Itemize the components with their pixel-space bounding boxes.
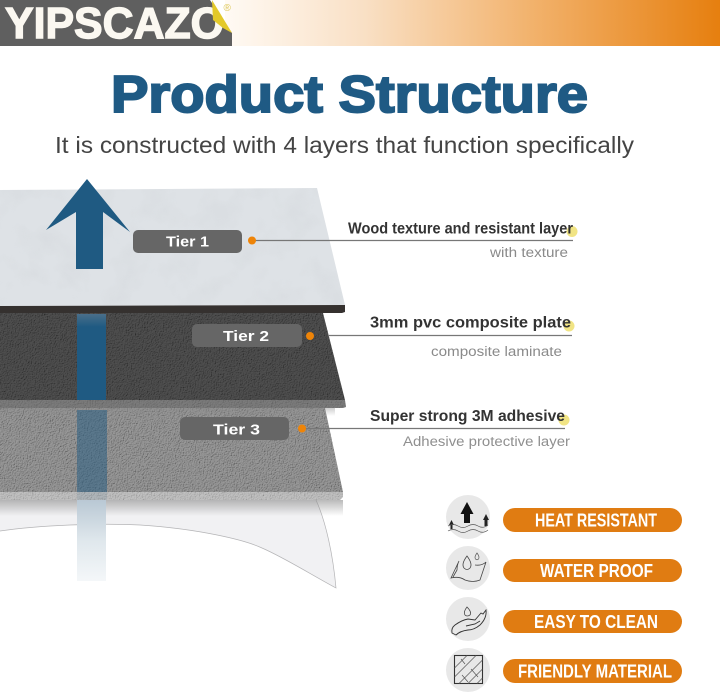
icon: heat arrows (446, 495, 490, 539)
icon: hand with drop (446, 597, 490, 641)
header banner (0, 0, 720, 48)
callout: tier 3: Super strong 3M adhesive (370, 408, 565, 425)
callout: tier 1: with texture (489, 245, 568, 260)
tier 1 label: Tier 1 (166, 234, 209, 250)
blue vertical bar through layers (77, 314, 107, 581)
badge: WATER PROOF (540, 561, 653, 581)
icon: flooring tiles (446, 648, 490, 692)
feature: water proof (446, 546, 682, 590)
upward arrow (46, 179, 130, 269)
tier 2 label (192, 324, 302, 347)
brand logo: YIPSCAZO (5, 0, 224, 48)
layered sheet diagram (0, 179, 346, 588)
feature: heat resistant (446, 495, 682, 539)
callout: tier 3 (180, 408, 571, 449)
protective film layer (0, 500, 343, 588)
tier 3 label (180, 417, 289, 440)
badge: FRIENDLY MATERIAL (518, 662, 672, 682)
tier 2 label: Tier 2 (223, 328, 269, 345)
badge (503, 659, 682, 683)
tier 3 sheet (0, 408, 343, 500)
tier 2 sheet (0, 313, 346, 408)
badge (503, 559, 682, 582)
badge: HEAT RESISTANT (535, 510, 657, 530)
feature: easy to clean (446, 597, 682, 641)
badge: EASY TO CLEAN (534, 612, 658, 632)
badge (503, 508, 682, 532)
tier 3 label: Tier 3 (213, 422, 260, 438)
callout: tier 3: Adhesive protective layer (403, 434, 571, 449)
brand logo: ® (224, 3, 232, 14)
icon: water on surface (446, 546, 490, 590)
callout: tier 2 (192, 314, 574, 359)
callout: tier 2: composite laminate (431, 344, 562, 359)
tier 1 sheet (0, 188, 345, 313)
feature: friendly material (446, 648, 682, 692)
callout: tier 2: 3mm pvc composite plate (370, 314, 571, 332)
callout: tier 1 (133, 220, 578, 260)
title: Product Structure (111, 66, 588, 124)
subtitle: It is constructed with 4 layers that function specifically (55, 132, 634, 158)
tier 1 label (133, 230, 242, 253)
callout: tier 1: Wood texture and resistant layer (348, 220, 573, 238)
